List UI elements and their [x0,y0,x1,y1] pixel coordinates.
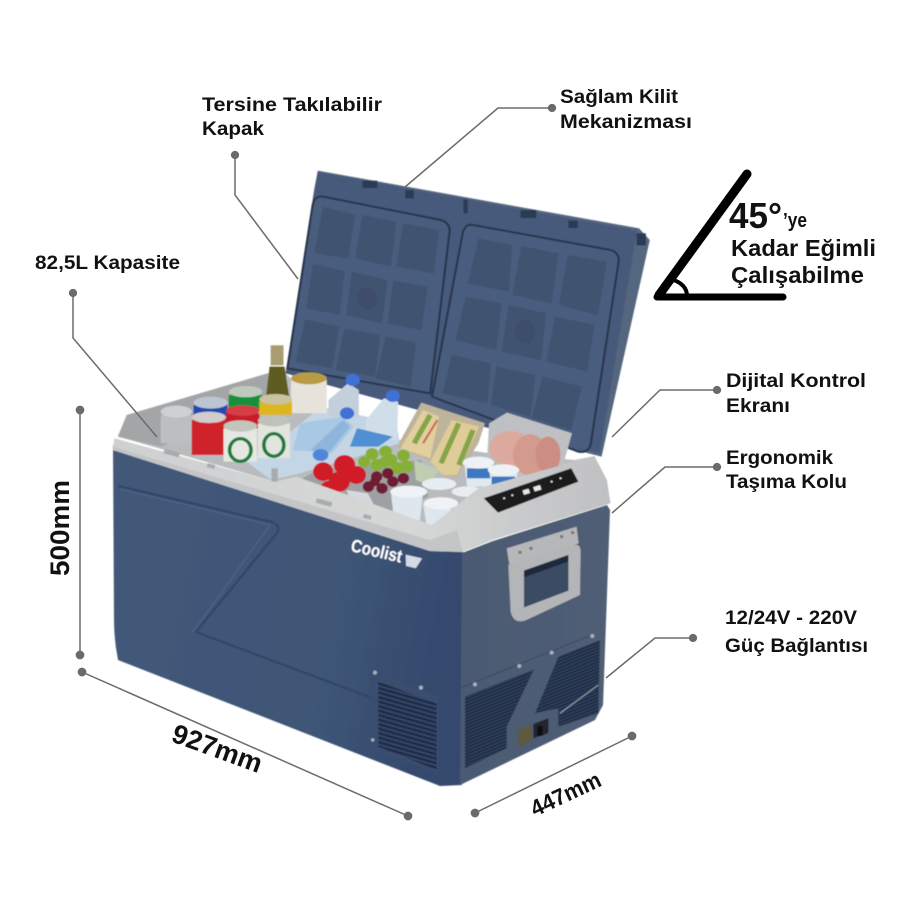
label: lock mechanism: Sağlam Kilit [560,87,679,108]
label: reversible lid: Kapak [202,119,264,140]
label: digital display [726,371,866,417]
brand logo: Coolist: Coolist [349,535,404,567]
leader line: handle [612,464,720,513]
front panel relief [118,486,372,698]
beer bottle [266,345,289,397]
ice and water bottles [246,374,400,480]
leader line: power [606,635,696,678]
label: 45 degree tilt [729,195,876,288]
digital control panel [484,468,578,513]
lid left panel [287,196,450,393]
rim clips [163,449,372,520]
label: digital display: Dijital Kontrol [726,371,866,392]
dimension line: depth [471,732,636,817]
lower body seam and compressor panel [370,634,600,773]
yogurt cups [390,457,519,527]
label: lock mechanism: Mekanizması [560,112,692,133]
illustration: portable cooler [113,171,650,786]
leader line: capacity [70,290,157,437]
open double lid [286,171,650,457]
label: digital display: Ekranı [726,396,790,417]
leader line: display [612,387,720,437]
side vent left [465,669,534,768]
dimension line: length [78,668,412,820]
label: power connection: 12/24V - 220V [725,608,857,629]
label: 45 degree tilt: 45° [729,195,782,236]
label: ergonomic handle [726,448,847,493]
label: reversible lid: Tersine Takılabilir [202,95,383,116]
power switch [518,718,548,747]
dimension label: 447mm: 447mm [526,766,605,822]
label: 45 degree tilt: Çalışabilme [731,262,864,288]
front vent [370,670,438,773]
dimension line: height [76,406,84,659]
sandwiches [397,403,485,477]
lid latches [362,181,646,245]
label: capacity: 82,5L Kapasite [35,253,180,274]
carry handle [507,527,581,621]
label: ergonomic handle: Taşıma Kolu [726,472,847,493]
icon: tilt angle [657,174,783,297]
cans [161,372,327,462]
grey rim and lid corner [113,438,611,552]
label: power connection: Güç Bağlantısı [725,636,868,657]
label: lock mechanism [560,87,692,133]
sliced ham [487,413,572,478]
side vent right [535,640,600,727]
screws [371,634,594,742]
leader line: lid [232,152,298,279]
leader line: lock [405,105,555,187]
cooler front face [113,445,463,786]
dimension label: 500mm: 500mm [45,480,75,576]
cooler interior and food [118,345,594,527]
label: power connection [725,608,868,657]
dimension label: 927mm: 927mm [168,718,267,779]
light power lead [560,685,598,713]
label: 45 degree tilt: ’ye [783,210,807,232]
fruit tray [296,446,439,513]
lid right panel [432,225,619,452]
label: reversible lid [202,95,383,140]
cooler side face [460,505,610,785]
label: 45 degree tilt: Kadar Eğimli [731,235,876,261]
label: ergonomic handle: Ergonomik [726,448,833,469]
